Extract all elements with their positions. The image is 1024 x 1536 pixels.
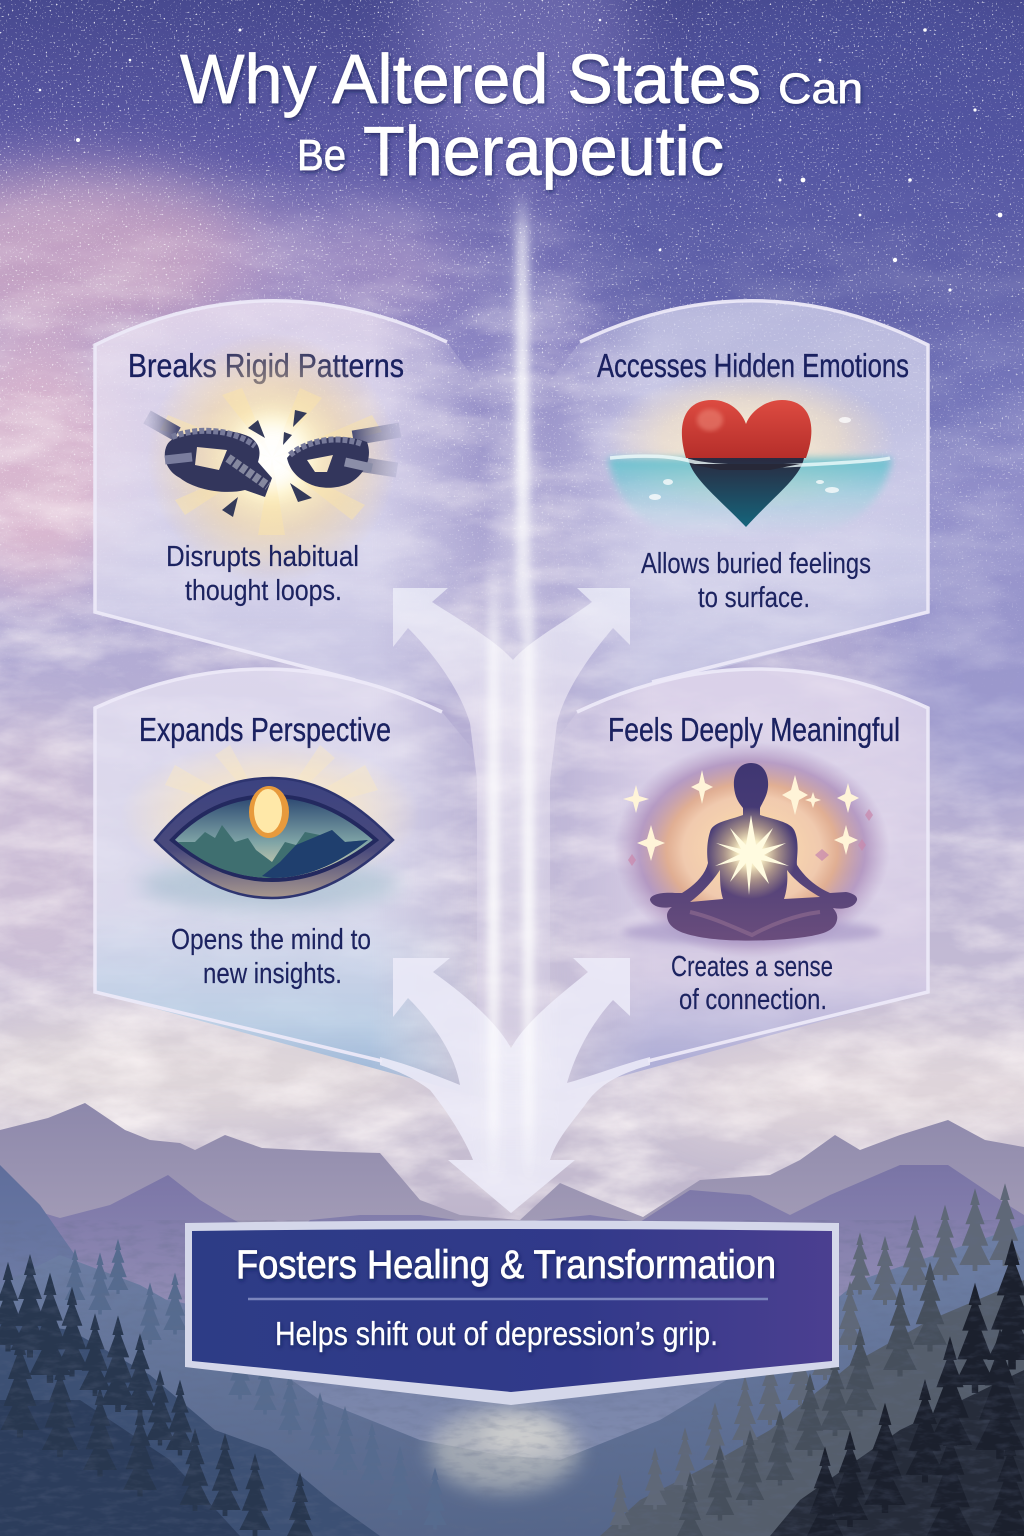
description: Allows buried feelings xyxy=(641,548,871,580)
outcome heading: Fosters Healing & Transformation xyxy=(236,1243,776,1287)
arrows: lower branches and downward arrow to outcome xyxy=(380,958,650,1213)
description: Opens the mind to xyxy=(171,924,371,956)
description: thought loops. xyxy=(185,575,342,607)
heading: Breaks Rigid Patterns xyxy=(128,347,404,384)
description: Disrupts habitual xyxy=(166,541,359,573)
icon: heart half submerged xyxy=(605,370,895,538)
description xyxy=(641,548,871,614)
heading: Accesses Hidden Emotions xyxy=(597,347,909,384)
outcome banner xyxy=(185,1220,839,1405)
description xyxy=(166,541,359,607)
panel: feels deeply meaningful xyxy=(567,667,930,1083)
title: Why Altered States xyxy=(180,40,761,118)
central light beam xyxy=(480,150,548,1180)
panel: accesses hidden emotions xyxy=(535,301,928,718)
description: of connection. xyxy=(679,984,827,1016)
icon: broken chain xyxy=(143,333,400,583)
title: Be xyxy=(297,131,346,180)
title: Therapeutic xyxy=(363,112,724,190)
panel: expands perspective xyxy=(93,667,460,1084)
heading: Expands Perspective xyxy=(139,711,391,748)
title: Can xyxy=(778,65,863,113)
description xyxy=(171,924,371,990)
background: night sky and clouds xyxy=(0,0,1024,1220)
title xyxy=(180,40,863,190)
icon: meditating figure xyxy=(614,742,890,958)
description xyxy=(671,951,833,1016)
outcome description: Helps shift out of depression’s grip. xyxy=(275,1315,718,1352)
heading: Feels Deeply Meaningful xyxy=(608,711,900,748)
icon: eye with mountains xyxy=(120,740,420,911)
description: Creates a sense xyxy=(671,951,833,983)
description: new insights. xyxy=(203,958,342,990)
arrows: upper branches and central trunk xyxy=(393,588,630,1045)
mountains and forest xyxy=(0,1103,1024,1536)
description: to surface. xyxy=(698,582,810,614)
panel: breaks rigid patterns xyxy=(95,301,490,718)
